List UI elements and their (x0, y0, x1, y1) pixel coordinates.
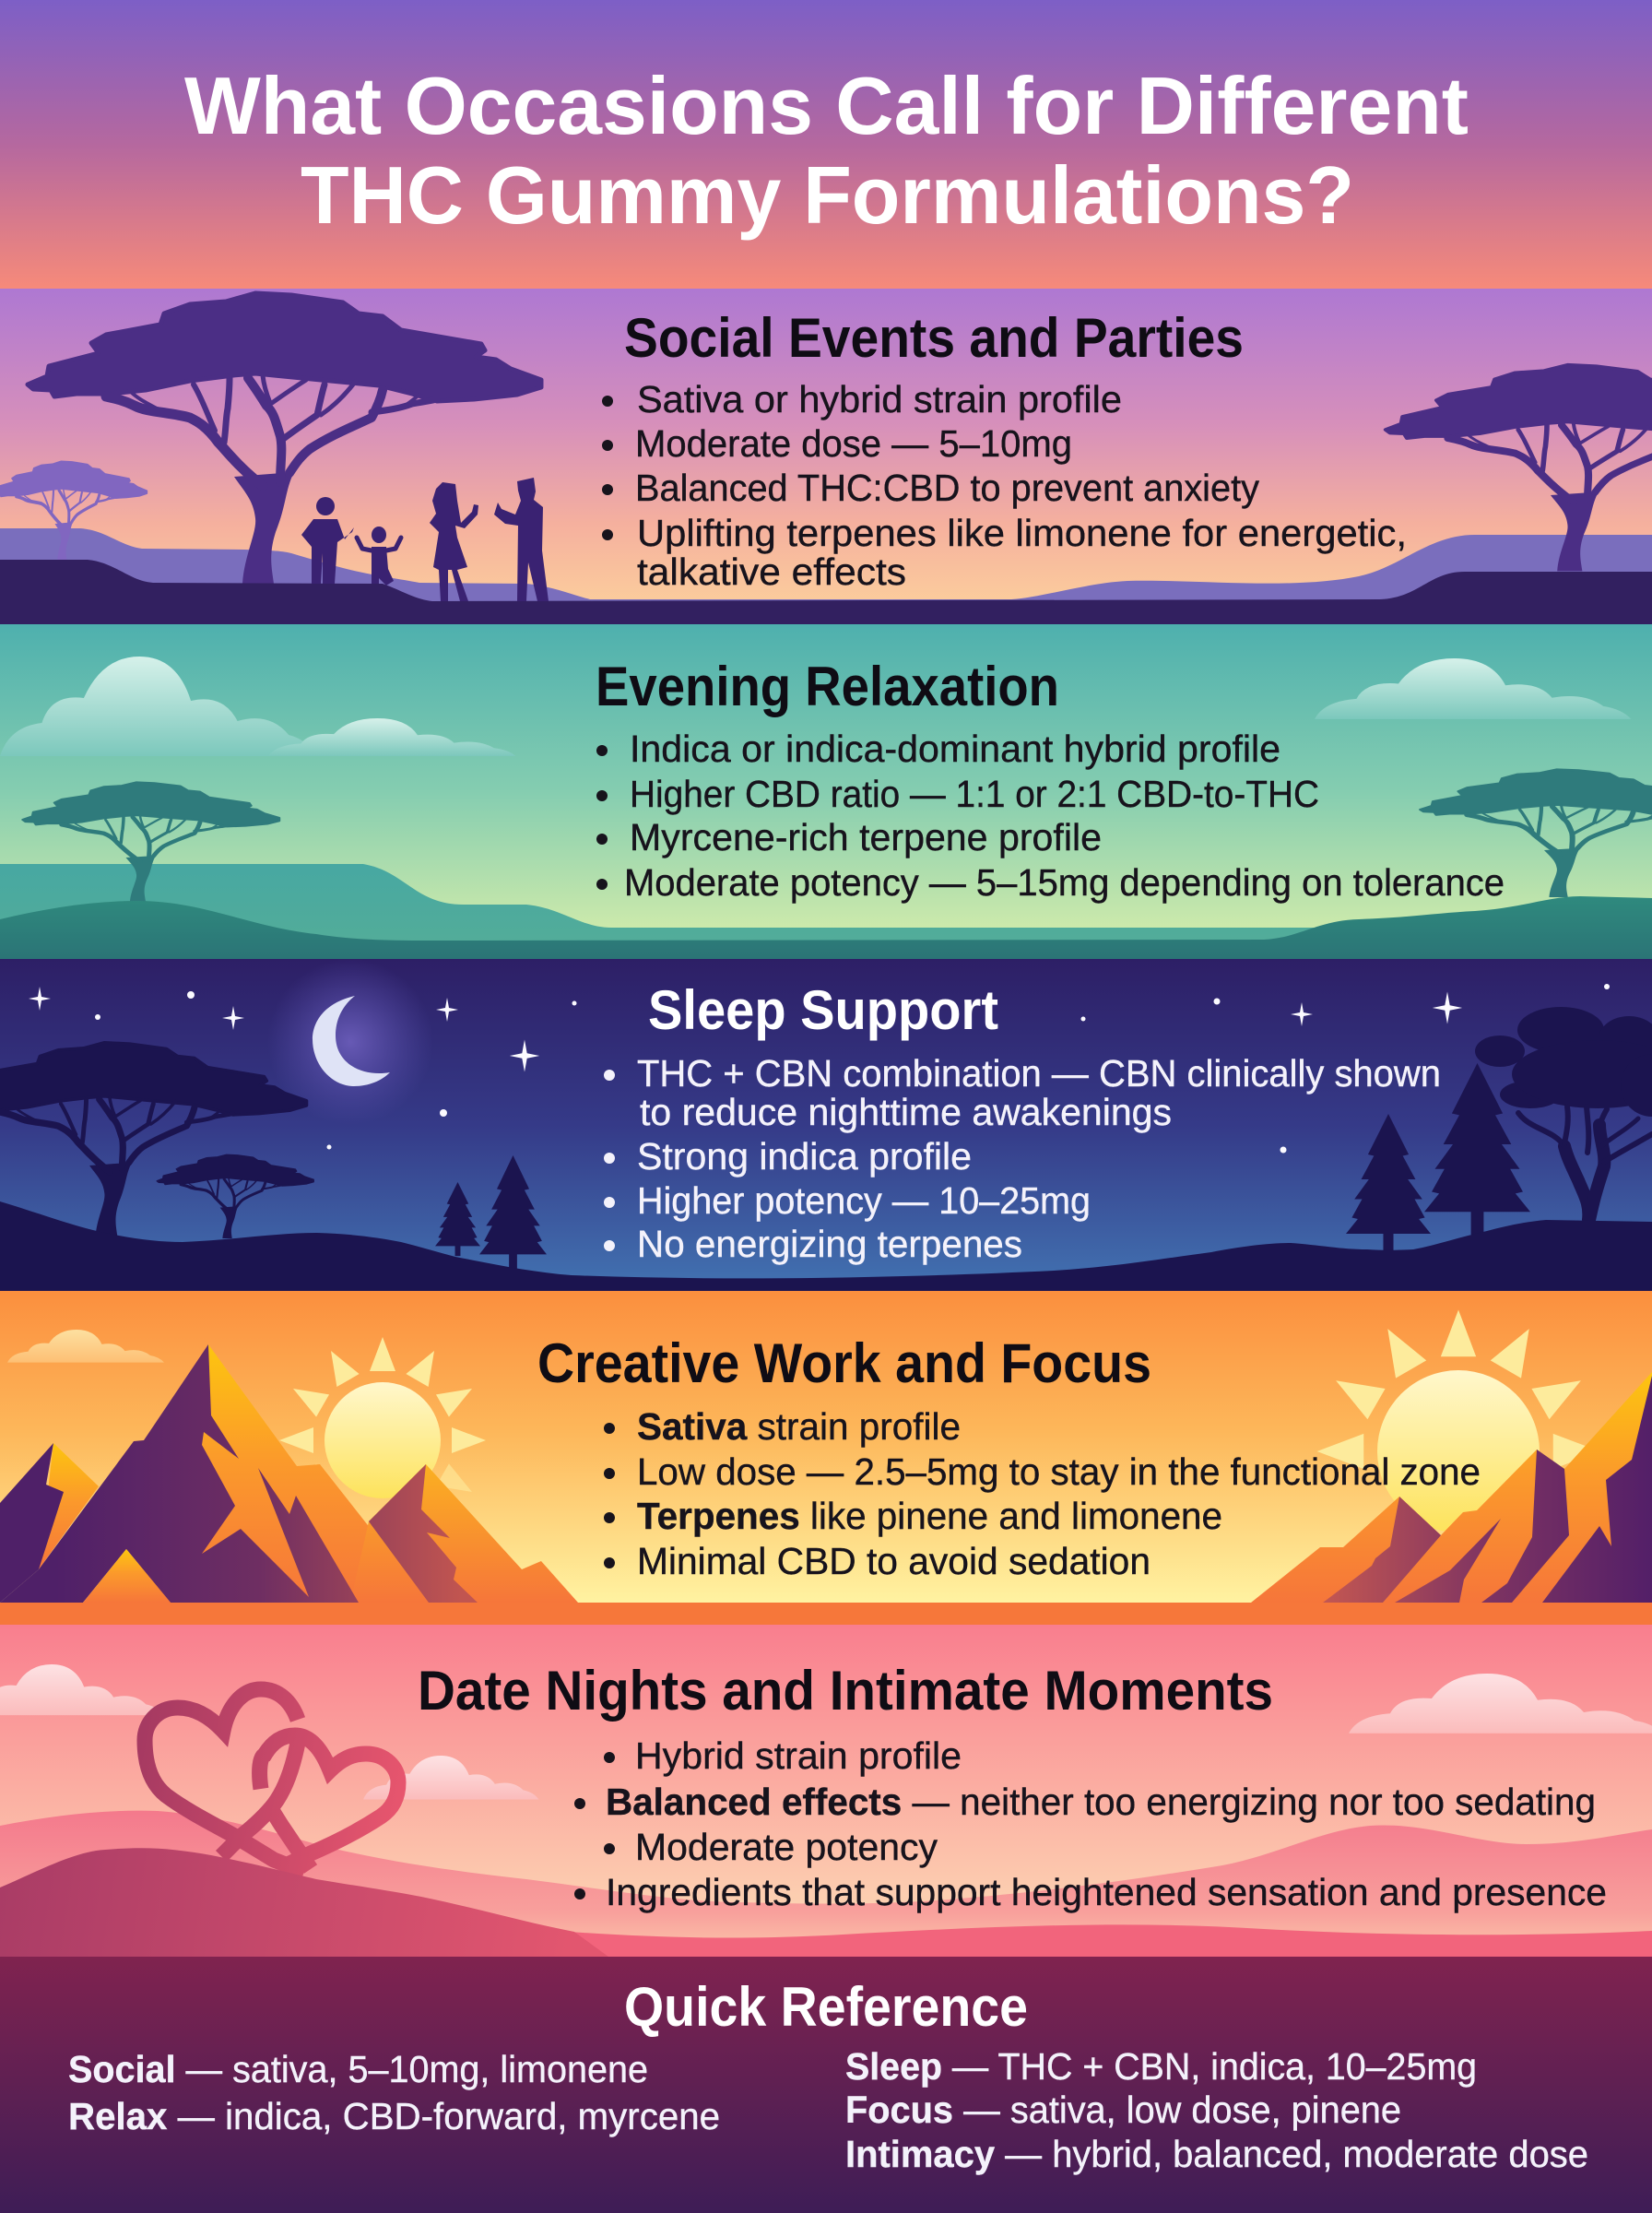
pink rolling hills (0, 1811, 1652, 1957)
bullet list: Balanced THC:CBD to prevent anxiety (635, 467, 1259, 509)
icon: right sun (1317, 1310, 1599, 1533)
heading: Creative Work and Focus (537, 1332, 1151, 1394)
icon: right acacia tree (1421, 769, 1652, 897)
panel: creative work and focus (0, 1291, 1652, 1625)
bullet list: Moderate potency — 5–15mg depending on tolerance (624, 861, 1504, 904)
icon: left mountains (0, 1344, 578, 1603)
icon: small distant tree (0, 461, 147, 560)
bullet list: to reduce nighttime awakenings (640, 1091, 1172, 1133)
bullet list (602, 378, 1407, 593)
bullet list: Ingredients that support heightened sensation and presence (606, 1871, 1607, 1913)
icon: right bulbous tree (1475, 1007, 1652, 1220)
icon: right acacia tree (1386, 365, 1652, 571)
right reference column: Intimacy — hybrid, balanced, moderate dose (845, 2133, 1588, 2175)
panel: date nights and intimate moments (0, 1625, 1652, 1957)
panel: evening relaxation (0, 624, 1652, 959)
heading: Social Events and Parties (624, 307, 1244, 369)
person: boy (301, 497, 354, 584)
bullet list: Indica or indica-dominant hybrid profile (630, 728, 1280, 770)
bullet list: Myrcene-rich terpene profile (630, 816, 1102, 858)
bullet list (574, 1734, 1607, 1913)
person: man (494, 478, 549, 601)
heading: Sleep Support (648, 979, 998, 1041)
panel: social events and parties (0, 289, 1652, 624)
bullet list (596, 728, 1504, 904)
bullet list: Balanced effects — neither too energizing nor too sedating (606, 1781, 1596, 1823)
bullet list: Higher CBD ratio — 1:1 or 2:1 CBD-to-THC (630, 773, 1319, 815)
near green hills (0, 896, 1652, 959)
bullet list: Higher potency — 10–25mg (637, 1179, 1091, 1222)
icon: cloud (7, 1330, 164, 1363)
dark foreground ground (0, 560, 1652, 624)
bullet list: talkative effects (637, 550, 906, 593)
title: What Occasions Call for Different (184, 60, 1469, 151)
icon: large acacia tree (28, 293, 541, 584)
icon: stars (29, 984, 1610, 1153)
bullet list: Hybrid strain profile (635, 1734, 962, 1777)
panel: sleep support (0, 959, 1652, 1291)
heading: Evening Relaxation (596, 656, 1059, 717)
orange ground band (0, 1603, 1652, 1625)
icon: right cloud (1315, 658, 1631, 719)
bullet list (604, 1405, 1481, 1582)
bullet list (604, 1052, 1441, 1265)
panel: header (0, 0, 1652, 289)
title (184, 60, 1469, 241)
icon: group of people silhouettes (301, 478, 549, 601)
person: child (357, 527, 401, 586)
left reference column: Relax — indica, CBD-forward, myrcene (68, 2095, 720, 2137)
bullet list: Minimal CBD to avoid sedation (637, 1540, 1150, 1582)
dark ground (0, 1201, 1652, 1291)
icon: clouds (0, 1664, 1652, 1800)
far teal hill (0, 864, 1652, 959)
bullet list: Strong indica profile (637, 1135, 972, 1178)
icon: right mountains (1251, 1372, 1652, 1603)
icon: left acacia trees (0, 1043, 313, 1238)
bullet list: Moderate potency (635, 1826, 938, 1868)
front pink band (516, 1924, 1652, 1957)
icon: right pine trees (1346, 1063, 1530, 1252)
bullet list: Uplifting terpenes like limonene for energetic, (637, 512, 1407, 554)
icon: left pine trees (435, 1155, 547, 1270)
bullet list: No energizing terpenes (637, 1223, 1022, 1265)
mid-ground lavender hills (0, 528, 1652, 624)
icon: interlocked hearts (145, 1689, 398, 1872)
bullet list: Sativa or hybrid strain profile (637, 378, 1122, 420)
icon: left acacia tree (22, 782, 279, 902)
person: woman (430, 482, 478, 601)
right reference column: Focus — sativa, low dose, pinene (845, 2089, 1401, 2131)
panel: quick reference (0, 1957, 1652, 2213)
icon: left sun (279, 1337, 486, 1503)
heading: Quick Reference (624, 1976, 1028, 2038)
right reference column (845, 2045, 1588, 2175)
bullet list: Terpenes like pinene and limonene (637, 1495, 1222, 1537)
title: THC Gummy Formulations? (301, 149, 1354, 241)
bullet list: THC + CBN combination — CBN clinically shown (637, 1052, 1441, 1095)
bullet list: Moderate dose — 5–10mg (635, 422, 1072, 465)
bullet list: Sativa strain profile (637, 1405, 961, 1448)
bullet list: Low dose — 2.5–5mg to stay in the functional zone (637, 1450, 1481, 1493)
icon: left clouds (0, 657, 516, 756)
dark left hill (0, 1848, 608, 1957)
icon: crescent moon with glow (267, 959, 433, 1125)
left reference column: Social — sativa, 5–10mg, limonene (68, 2048, 648, 2090)
right reference column: Sleep — THC + CBN, indica, 10–25mg (845, 2045, 1477, 2088)
left reference column (68, 2048, 720, 2137)
heading: Date Nights and Intimate Moments (418, 1660, 1273, 1722)
